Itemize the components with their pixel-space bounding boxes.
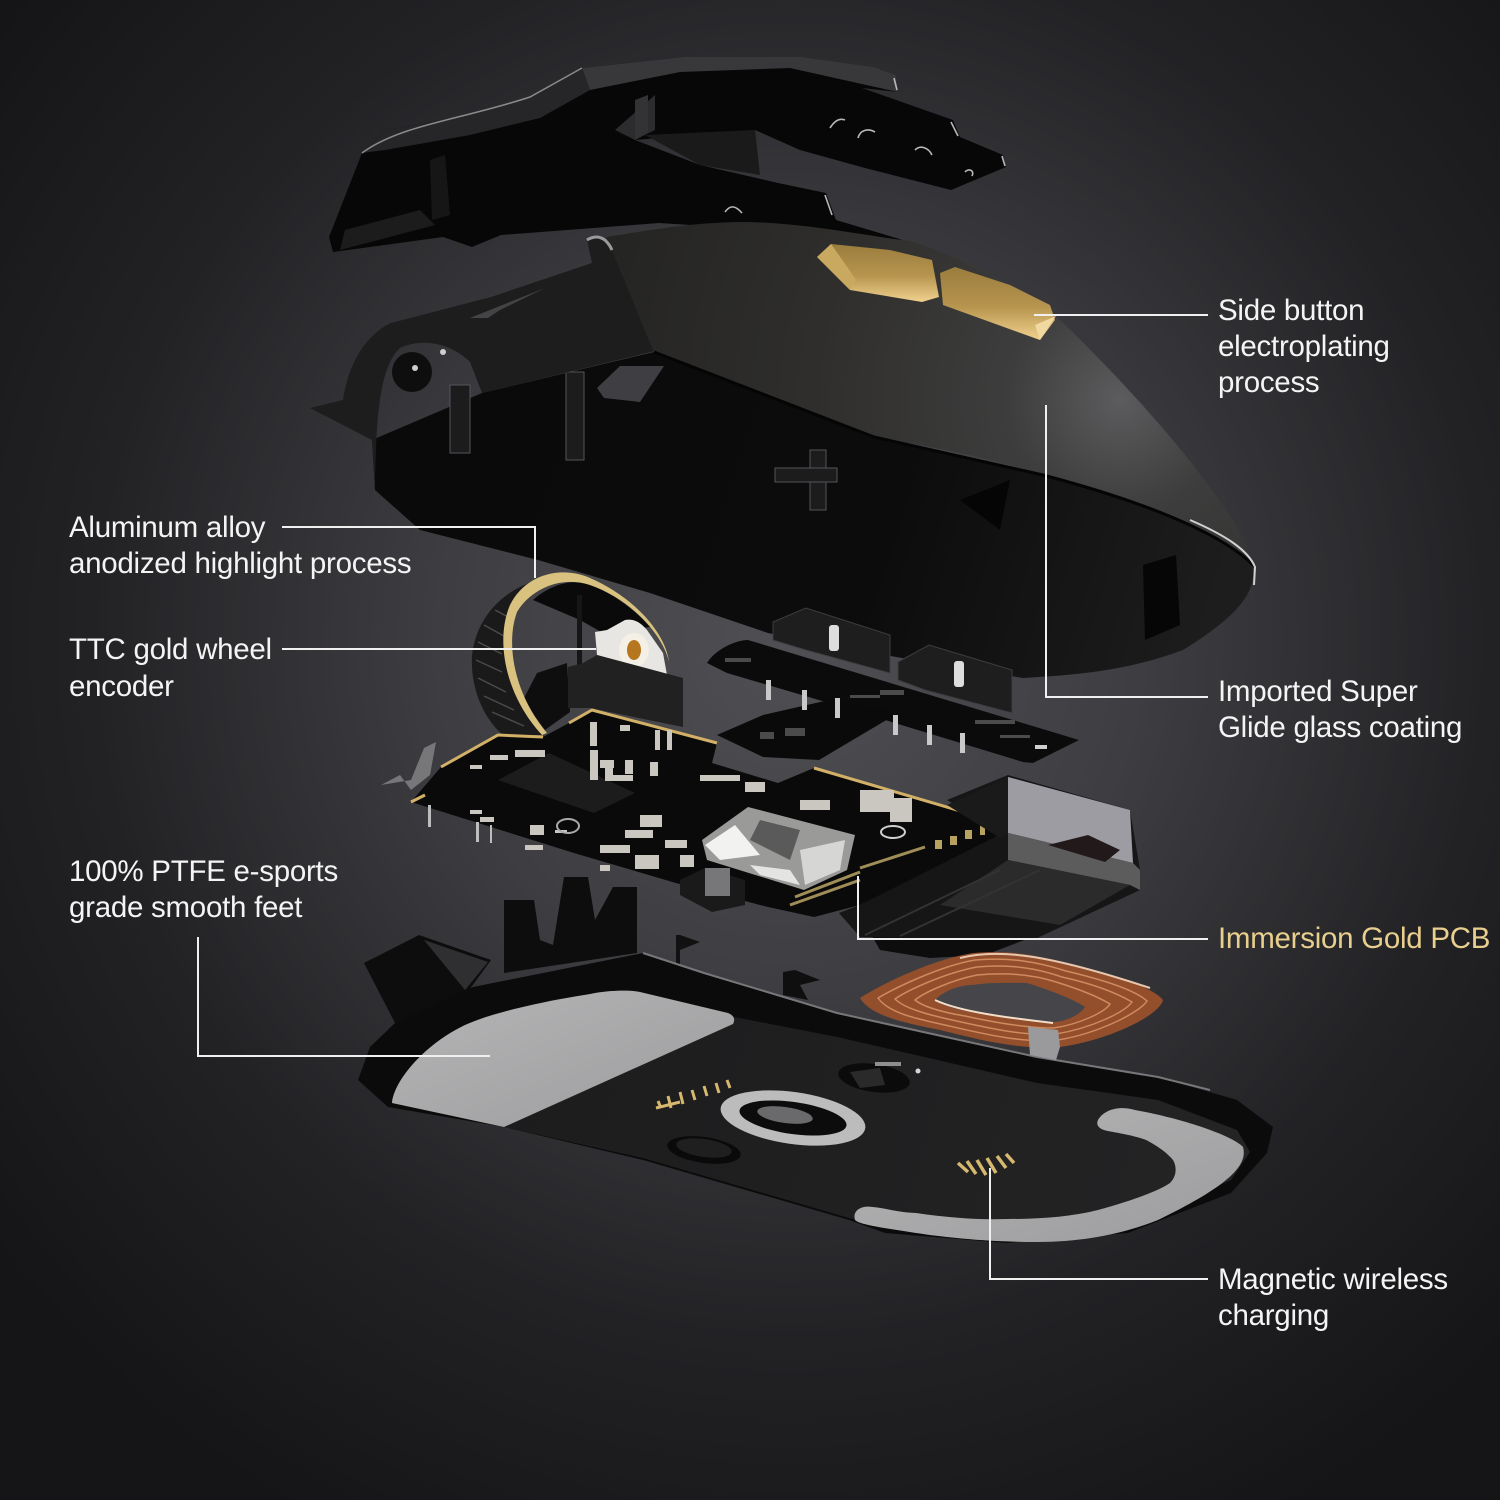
usb connector (680, 868, 745, 912)
label: side button: process (1218, 366, 1319, 399)
crystal chip (702, 807, 855, 890)
solder speckle (725, 658, 1030, 739)
wheel mount block (498, 753, 635, 813)
right PTFE foot (854, 1108, 1244, 1242)
label: PTFE feet: 100% PTFE e-sports (69, 855, 338, 888)
label: glass coating: Glide glass coating (1218, 711, 1462, 744)
power button (666, 1132, 742, 1168)
interior window (597, 366, 664, 402)
lower dark part in wheel (523, 663, 570, 730)
label: immersion gold PCB (858, 876, 1490, 955)
label: side button: electroplating (1218, 330, 1390, 363)
bottom case (358, 877, 1273, 1243)
switch knob (836, 1059, 920, 1097)
switch board (707, 608, 1079, 763)
label: gold wheel encoder (69, 633, 596, 703)
top shell cover (329, 57, 1006, 252)
gold edges (411, 710, 1000, 837)
sensor box (839, 775, 1140, 940)
label: gold wheel encoder: encoder (69, 670, 174, 703)
small clips (676, 935, 700, 965)
label: gold wheel encoder: TTC gold wheel (69, 633, 272, 666)
scroll wheel (472, 572, 683, 735)
base face (392, 991, 1250, 1238)
label: aluminum alloy: Aluminum alloy (69, 511, 266, 544)
connector left (381, 742, 436, 790)
switch pills (829, 625, 839, 651)
white encoder disc (595, 620, 667, 675)
switch 1 (773, 608, 890, 673)
left PTFE foot (392, 991, 734, 1127)
label: side button (1034, 294, 1390, 399)
label: glass coating (1046, 405, 1462, 744)
pins under PCB (428, 805, 492, 843)
gold marks (656, 1080, 1014, 1175)
sensor ring (717, 1082, 869, 1154)
label: aluminum alloy (69, 511, 535, 580)
interior posts (450, 372, 837, 510)
label: side button: Side button (1218, 294, 1364, 327)
left wing (310, 237, 659, 490)
copper coil (860, 952, 1163, 1060)
label: PTFE feet (69, 855, 490, 1056)
base edge highlight (643, 953, 1210, 1090)
top surface (606, 222, 1255, 567)
wheel tread (472, 582, 542, 735)
fins (504, 877, 637, 973)
encoder pivot (619, 633, 649, 667)
label: immersion gold PCB: Immersion Gold PCB (1218, 922, 1490, 955)
label: PTFE feet: grade smooth feet (69, 891, 302, 924)
switch 2 (898, 645, 1012, 713)
wing hub (392, 352, 432, 392)
base body (358, 953, 1273, 1243)
pins (766, 680, 965, 753)
wheel axle (577, 595, 582, 698)
label: glass coating: Imported Super (1218, 675, 1418, 708)
upper dark arc in wheel (533, 582, 650, 633)
shell interior (372, 352, 1253, 678)
gold ring (503, 572, 669, 735)
label: wireless charging: Magnetic wireless (1218, 1263, 1448, 1296)
pads gold (935, 826, 985, 849)
label: wireless charging (990, 1168, 1448, 1332)
label: aluminum alloy: anodized highlight process (69, 547, 411, 580)
main mouse shell (310, 222, 1255, 678)
gold side buttons (817, 244, 1056, 340)
components (470, 722, 912, 871)
label: wireless charging: charging (1218, 1299, 1329, 1332)
coil clip (1028, 1027, 1060, 1060)
sensor shadow under box (872, 936, 1035, 958)
battery flap (364, 935, 491, 1023)
immersion gold PCB (381, 710, 1140, 958)
encoder block (568, 655, 683, 727)
